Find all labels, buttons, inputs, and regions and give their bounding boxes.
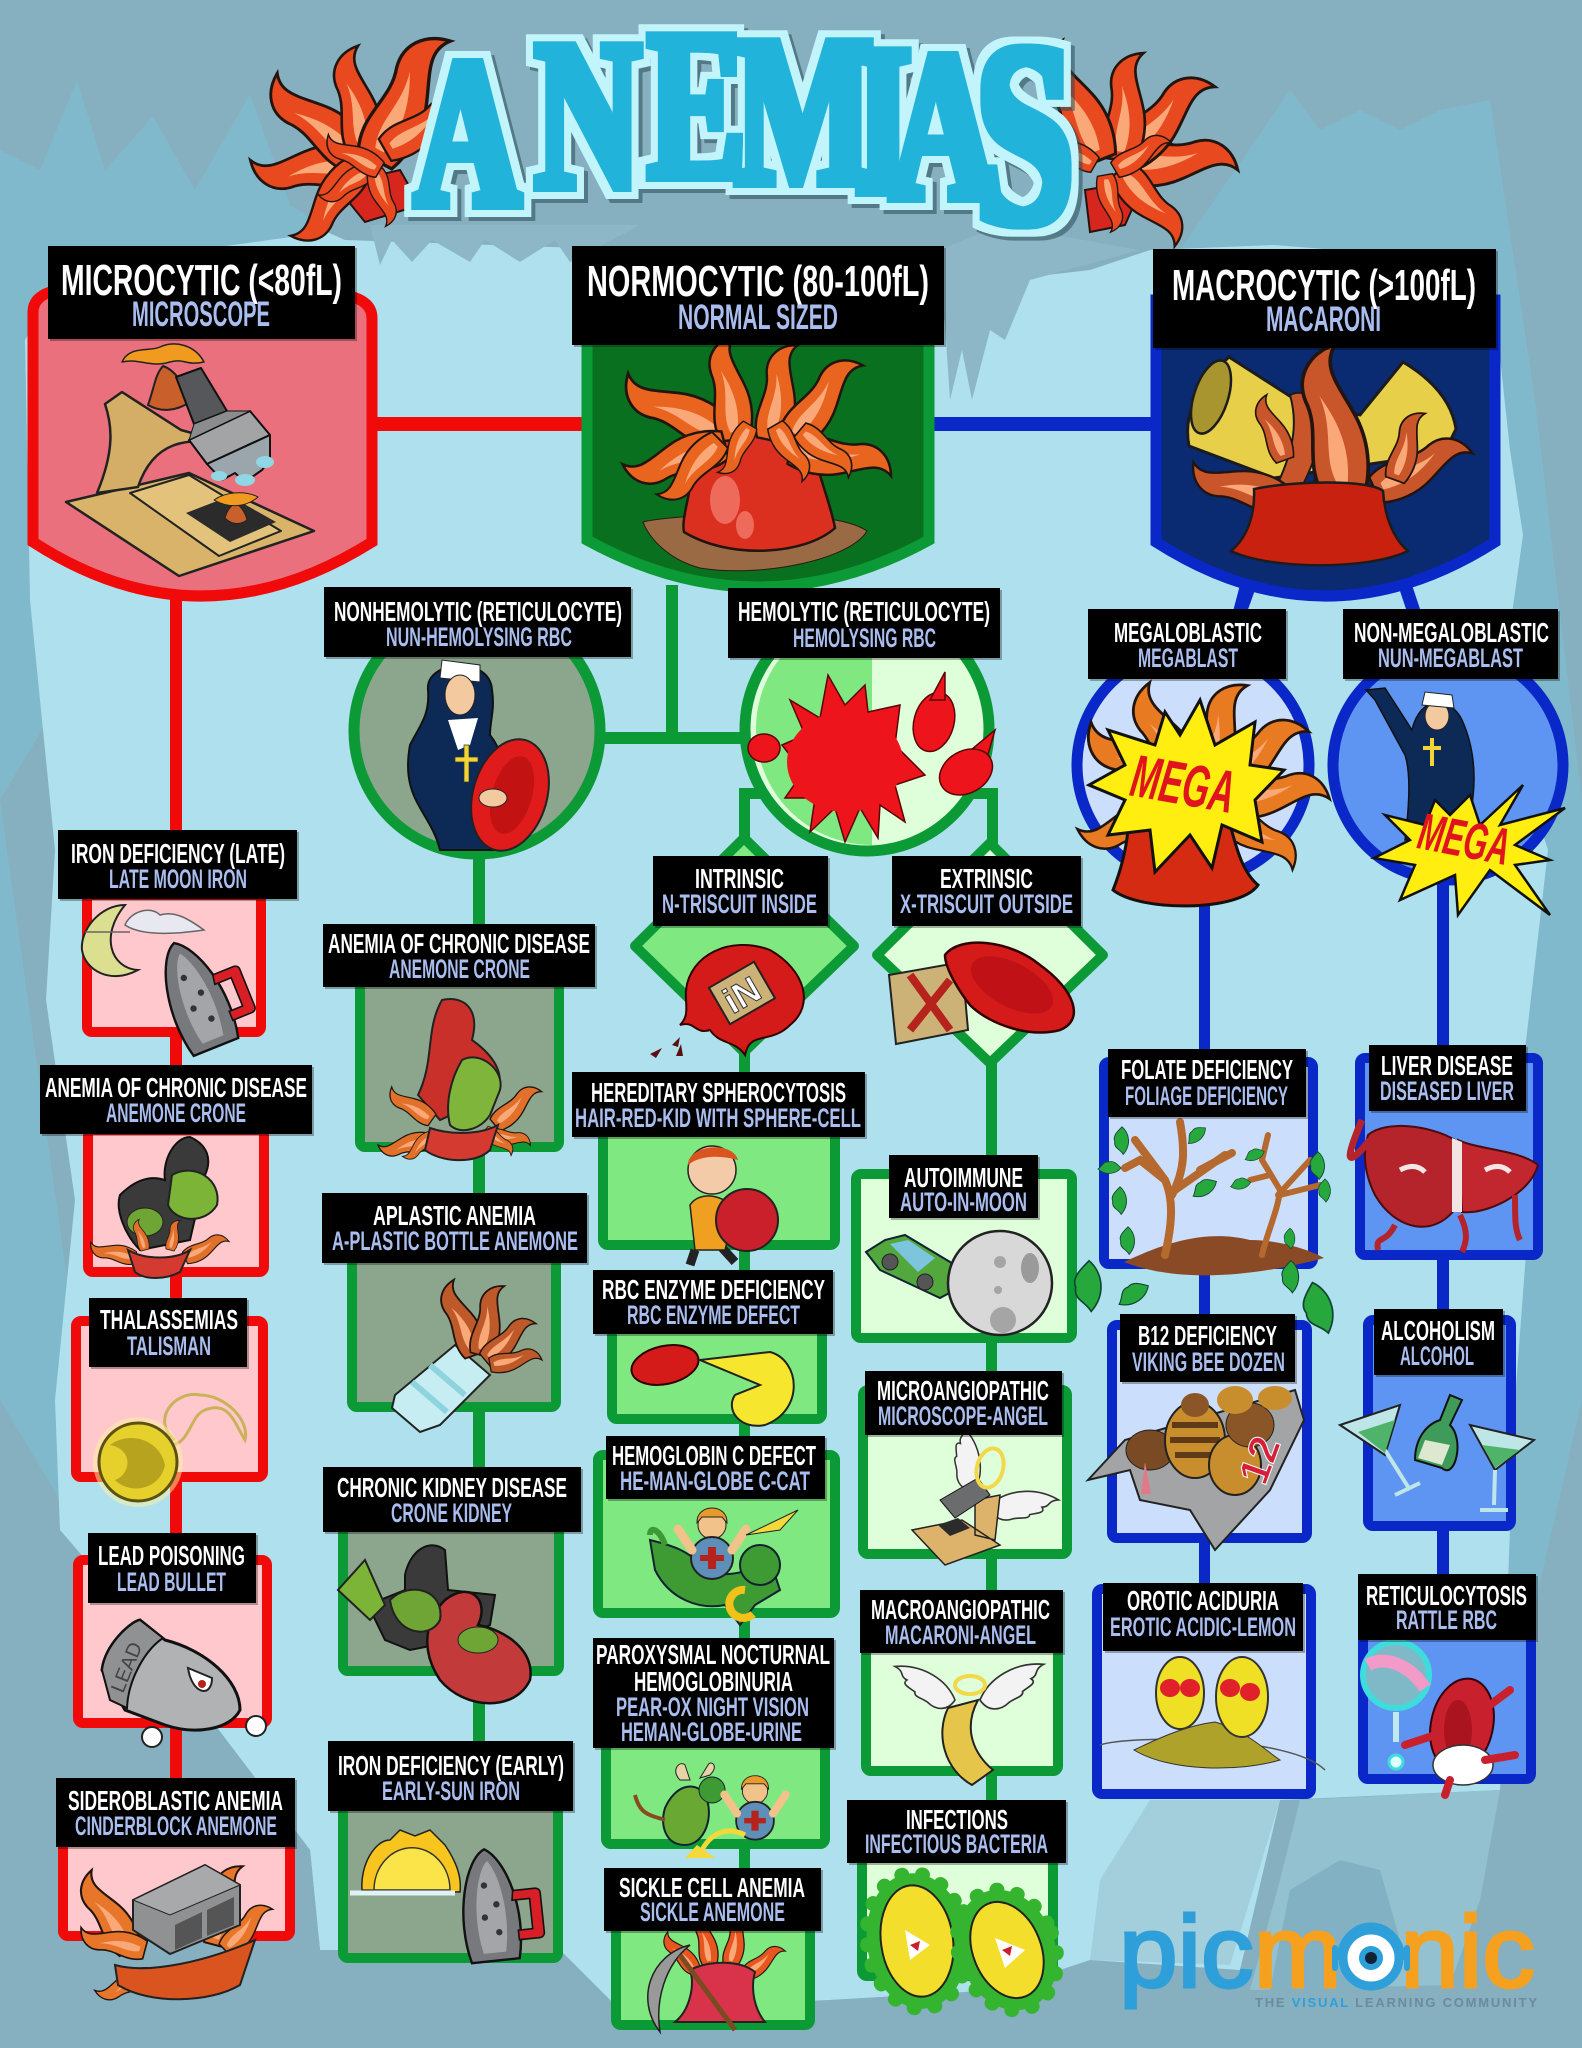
icon: nun with RBC [408, 660, 561, 860]
icon: dozen viking bees in egg carton [1088, 1386, 1304, 1550]
label: iron deficiency early: EARLY-SUN IRON [382, 1776, 520, 1806]
label: infections [847, 1800, 1068, 1865]
label: thalassemias: THALASSEMIAS [100, 1304, 238, 1335]
label: hemolytic: HEMOLYTIC (RETICULOCYTE) [738, 596, 990, 627]
label: megaloblastic: MEGABLAST [1138, 643, 1238, 673]
panel: iron deficiency late [58, 830, 299, 1057]
label: reticulocytosis [1358, 1574, 1538, 1642]
icon: mega anemone [1075, 675, 1331, 906]
icon: nun with mega burst [1366, 688, 1565, 915]
icon: macaroni angel [895, 1664, 1044, 1785]
icon: lemons on island [1100, 1657, 1325, 1770]
label: infections: INFECTIOUS BACTERIA [865, 1829, 1048, 1859]
icon: lead bullet: LEAD [107, 1639, 147, 1696]
icon: moon and iron [82, 905, 263, 1057]
label: extrinsic [892, 856, 1083, 928]
label: microangiopathic [865, 1371, 1064, 1437]
label: microangiopathic: MICROSCOPE-ANGEL [878, 1401, 1048, 1431]
label: lead poisoning: LEAD BULLET [117, 1567, 226, 1597]
icon: cinderblock anemone [72, 1861, 277, 2004]
panel: microangiopathic [863, 1371, 1067, 1565]
panel: anemia of chronic disease (microcytic) [40, 1065, 314, 1278]
label: nonhemolytic: NONHEMOLYTIC (RETICULOCYTE) [334, 596, 622, 627]
label: anemia of chronic disease (normocytic): ANEMONE CRONE [389, 954, 530, 984]
panel: aplastic anemia [322, 1193, 589, 1432]
label: autoimmune: AUTOIMMUNE [904, 1162, 1023, 1193]
label: normocytic: NORMOCYTIC (80-100fL) [587, 257, 929, 306]
label: chronic kidney disease [323, 1467, 583, 1534]
label: microcytic [48, 246, 357, 341]
label: aplastic anemia: APLASTIC ANEMIA [373, 1200, 536, 1231]
label: intrinsic: INTRINSIC [695, 863, 784, 894]
label: B12 deficiency: VIKING BEE DOZEN [1132, 1347, 1285, 1377]
label: aplastic anemia [322, 1193, 589, 1265]
icon: sea anemone [614, 335, 896, 571]
label: anemia of chronic disease (normocytic): ANEMIA OF CHRONIC DISEASE [328, 928, 590, 959]
panel: lead poisoning [78, 1533, 267, 1747]
icon: RBC with triscuit outside [889, 943, 1074, 1044]
label: chronic kidney disease: CHRONIC KIDNEY DISEASE [337, 1472, 567, 1503]
label: reticulocytosis: RATTLE RBC [1396, 1605, 1497, 1635]
label: B12 deficiency: B12 DEFICIENCY [1138, 1320, 1277, 1351]
panel: macroangiopathic [860, 1590, 1065, 1785]
label: nonhemolytic [324, 587, 633, 659]
label: intrinsic [653, 856, 830, 928]
icon: dark crone [88, 1137, 231, 1278]
icon: eye with headphones [1332, 1924, 1410, 1986]
label: iron deficiency late [58, 830, 299, 901]
icon: talisman [93, 1394, 246, 1507]
panel: iron deficiency early [328, 1741, 575, 1964]
icon: red hood crone [377, 999, 546, 1163]
label: liver disease [1369, 1045, 1528, 1113]
text: MEGA: MEGA [1126, 742, 1240, 826]
label: hereditary spherocytosis [572, 1072, 867, 1139]
icon: diseased liver [1350, 1120, 1538, 1252]
icon: title anemone left [250, 24, 475, 252]
label: paroxysmal nocturnal hemoglobinuria: PEAR-OX NIGHT VISION [616, 1692, 809, 1722]
label: anemia of chronic disease (microcytic) [40, 1065, 314, 1136]
label: lead poisoning: LEAD POISONING [98, 1540, 245, 1571]
label: orotic aciduria: EROTIC ACIDIC-LEMON [1110, 1612, 1296, 1642]
label: folate deficiency: FOLATE DEFICIENCY [1121, 1054, 1293, 1085]
label: RBC enzyme deficiency: RBC ENZYME DEFECT [627, 1300, 800, 1330]
icon: crone with kidney [338, 1545, 531, 1703]
label: macrocytic: MACARONI [1266, 300, 1381, 339]
connectors: blue [930, 417, 1449, 1590]
connectors: green [473, 585, 998, 1930]
label: hereditary spherocytosis: HEREDITARY SPHEROCYTOSIS [591, 1077, 846, 1108]
logo: picmonic: picmonic [1119, 1895, 1535, 2009]
label: normocytic: NORMAL SIZED [678, 298, 838, 337]
icon: martini glasses and bottle [1340, 1395, 1534, 1510]
label: autoimmune: AUTO-IN-MOON [900, 1187, 1027, 1217]
panel: chronic kidney disease [323, 1467, 583, 1703]
label: iron deficiency early: IRON DEFICIENCY (EARLY) [338, 1750, 564, 1781]
icon: sickle anemone [648, 1912, 788, 2032]
label: anemia of chronic disease (microcytic): ANEMONE CRONE [106, 1098, 246, 1128]
icon: car and moon [866, 1231, 1052, 1335]
label: sideroblastic anemia [56, 1778, 297, 1849]
panel: alcoholism [1340, 1309, 1534, 1526]
label: anemia of chronic disease (microcytic): ANEMIA OF CHRONIC DISEASE [45, 1072, 307, 1103]
icon: microscope angel [912, 1427, 1059, 1565]
panel: extrinsic [877, 843, 1103, 1063]
label: paroxysmal nocturnal hemoglobinuria: PAROXYSMAL NOCTURNAL [596, 1639, 830, 1670]
label: RBC enzyme deficiency [593, 1270, 835, 1336]
label: macroangiopathic [860, 1590, 1065, 1655]
label: macrocytic [1153, 249, 1498, 350]
label: sickle cell anemia [604, 1868, 823, 1933]
label: RBC enzyme deficiency: RBC ENZYME DEFICIENCY [602, 1274, 825, 1305]
label: iron deficiency early [328, 1741, 575, 1813]
panel: infections [847, 1800, 1075, 2025]
panel: nonhemolytic [324, 587, 633, 860]
label: infections: INFECTIONS [906, 1804, 1008, 1835]
label: sideroblastic anemia: CINDERBLOCK ANEMONE [75, 1811, 277, 1841]
icon: title anemone right [1032, 36, 1238, 253]
panel: megaloblastic [1075, 609, 1331, 906]
label: microcytic: MICROCYTIC (<80fL) [61, 256, 342, 305]
icon: infectious bacteria [858, 1867, 1075, 2025]
icon: he-man on C-cat [650, 1508, 798, 1625]
label: iron deficiency late: IRON DEFICIENCY (LATE) [71, 838, 285, 869]
label: lead poisoning [88, 1533, 258, 1605]
icon: dozen viking bees in egg carton: 12 [1229, 1430, 1289, 1490]
label: extrinsic: EXTRINSIC [940, 863, 1033, 894]
label: folate deficiency [1108, 1049, 1308, 1119]
panel: reticulocytosis [1358, 1574, 1538, 1795]
panel: hereditary spherocytosis [572, 1072, 867, 1265]
panel: microcytic [33, 246, 372, 596]
panel: paroxysmal nocturnal hemoglobinuria [593, 1638, 836, 1858]
label: chronic kidney disease: CRONE KIDNEY [391, 1498, 512, 1528]
icon: microscope [66, 344, 314, 576]
panel: orotic aciduria [1097, 1583, 1325, 1794]
label: alcoholism: ALCOHOL [1400, 1341, 1474, 1371]
panel: intrinsic [635, 838, 854, 1058]
icon: hemolysing RBC [748, 672, 1001, 842]
label: alcoholism [1374, 1309, 1505, 1377]
label: anemia of chronic disease (normocytic) [323, 924, 597, 989]
panel: B12 deficiency [1088, 1314, 1307, 1550]
label: alcoholism: ALCOHOLISM [1381, 1315, 1495, 1346]
label: sickle cell anemia: SICKLE ANEMONE [640, 1897, 785, 1927]
panel: liver disease [1350, 1045, 1538, 1255]
panel: normocytic [572, 246, 946, 587]
label: sickle cell anemia: SICKLE CELL ANEMIA [619, 1872, 805, 1903]
icon: RBC with triscuit inside: iN [716, 968, 768, 1022]
label: autoimmune [889, 1155, 1040, 1220]
panel: non-megaloblastic [1333, 609, 1565, 915]
label: thalassemias: TALISMAN [127, 1331, 211, 1361]
label: hemolytic [728, 588, 1002, 660]
connectors: red [170, 417, 585, 1850]
label: aplastic anemia: A-PLASTIC BOTTLE ANEMONE [332, 1226, 578, 1256]
tagline: THE VISUAL LEARNING COMMUNITY [1255, 1995, 1537, 2010]
label: paroxysmal nocturnal hemoglobinuria: HEMAN-GLOBE-URINE [621, 1717, 802, 1747]
label: B12 deficiency [1120, 1314, 1297, 1384]
label: microangiopathic: MICROANGIOPATHIC [877, 1375, 1049, 1406]
label: folate deficiency: FOLIAGE DEFICIENCY [1125, 1081, 1288, 1111]
label: non-megaloblastic [1343, 609, 1560, 681]
icon: dying trees [1075, 1122, 1338, 1338]
label: hemoglobin C defect [606, 1436, 827, 1501]
label: intrinsic: N-TRISCUIT INSIDE [662, 889, 817, 919]
panel: autoimmune [856, 1155, 1072, 1338]
panel: sideroblastic anemia [56, 1778, 297, 2004]
label: iron deficiency late: LATE MOON IRON [109, 864, 247, 894]
label: hemolytic: HEMOLYSING RBC [793, 623, 936, 653]
label: paroxysmal nocturnal hemoglobinuria: HEMOGLOBINURIA [634, 1666, 793, 1697]
icon: plastic bottle anemone [392, 1277, 543, 1432]
panel: sickle cell anemia [604, 1868, 823, 2032]
label: normocytic [572, 246, 946, 347]
label: megaloblastic: MEGALOBLASTIC [1114, 617, 1262, 648]
icon: rising sun and iron [350, 1830, 547, 1964]
label: megaloblastic [1088, 609, 1288, 681]
panel: hemolytic [728, 588, 1002, 851]
label: sideroblastic anemia: SIDEROBLASTIC ANEMIA [68, 1785, 283, 1816]
label: extrinsic: X-TRISCUIT OUTSIDE [900, 889, 1073, 919]
label: paroxysmal nocturnal hemoglobinuria [593, 1638, 836, 1750]
label: microcytic: MICROSCOPE [132, 295, 270, 334]
icon: pear-ox and he-man [635, 1763, 786, 1858]
panel: thalassemias [76, 1298, 263, 1507]
icon: macaroni and tentacles [1183, 342, 1477, 565]
icon: rattle and baby RBC [1363, 1642, 1515, 1795]
panel: RBC enzyme deficiency [593, 1270, 835, 1426]
icon: RBC with triscuit inside [650, 945, 804, 1058]
panel: anemia of chronic disease (normocytic) [323, 924, 597, 1163]
label: orotic aciduria: OROTIC ACIDURIA [1127, 1585, 1279, 1616]
label: hemoglobin C defect: HE-MAN-GLOBE C-CAT [620, 1466, 810, 1496]
label: thalassemias [89, 1298, 249, 1369]
label: nonhemolytic: NUN-HEMOLYSING RBC [386, 622, 572, 652]
icon: lead bullet [102, 1620, 266, 1747]
icon: kid with red ball [688, 1146, 778, 1265]
label: hereditary spherocytosis: HAIR-RED-KID WITH SPHERE-CELL [575, 1103, 861, 1133]
panel: macrocytic [1153, 249, 1498, 596]
label: hemoglobin C defect: HEMOGLOBIN C DEFECT [612, 1440, 816, 1471]
text: MEGA: MEGA [1413, 803, 1515, 877]
panel: folate deficiency [1075, 1049, 1338, 1338]
label: orotic aciduria [1103, 1583, 1305, 1653]
label: macroangiopathic: MACARONI-ANGEL [885, 1620, 1036, 1650]
label: macroangiopathic: MACROANGIOPATHIC [871, 1594, 1050, 1625]
icon: RBC and enzyme pacman [628, 1339, 794, 1426]
panel: hemoglobin C defect [598, 1436, 835, 1625]
